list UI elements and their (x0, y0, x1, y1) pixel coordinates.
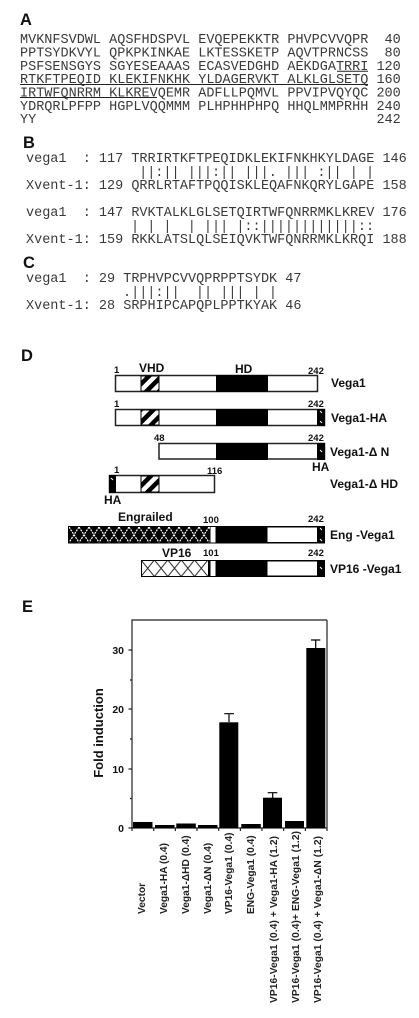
bars (133, 648, 325, 828)
sequence lines: RTKFTPEQID KLEKIFNKHK YLDAGERVKT ALKLGLSETQ 160 (20, 73, 401, 88)
construct: Eng-Vega1: Engrailed (118, 510, 173, 524)
construct: Vega1-HA: 1 (114, 399, 120, 410)
construct: Vega1-delta-N: 242 (308, 433, 324, 444)
construct: Vega1-delta-HD (104, 465, 398, 507)
construct: Vega1-delta-HD: HA (104, 493, 122, 507)
construct: Vega1-delta-N: 48 (154, 433, 165, 444)
construct: Vega1-delta-N: HA (312, 460, 330, 474)
construct: VP16-Vega1: VP16 (162, 546, 192, 560)
alignment block: Xvent-1: 28 SRPHIPCAPQPLPPTKYAK 46 (26, 299, 301, 314)
y axis tick labels: 10 (112, 764, 124, 776)
alignment block 2: vega1 : 147 RVKTALKLGLSETQIRTWFQNRRMKLKREV 176 (26, 206, 407, 221)
heading A: A (20, 11, 32, 29)
x axis category labels: ENG-Vega1 (0.4) (246, 835, 257, 914)
construct: VP16-Vega1: 101 (203, 548, 220, 559)
construct: Eng-Vega1: Eng -Vega1 (330, 528, 395, 542)
panel C: alignment of VHD (23, 254, 301, 314)
construct: Eng-Vega1: 100 (203, 515, 219, 526)
alignment block 1: ||:|| |||:|| |||. ||| :|| | | (131, 166, 374, 181)
sequence lines: PPTSYDKVYL QPKPKINKAE LKTESSKETP AQVTPRNCSS 80 (20, 46, 401, 61)
construct: Vega1: 242 (308, 366, 324, 377)
construct: Vega1: Vega1 (331, 376, 366, 390)
panel B: alignment with Xvent-1 homeodomain (23, 134, 407, 248)
sequence lines: IRTWFQNRRM KLKREVQEMR ADFLLPQMVL PPVIPVQYQC 200 (20, 86, 401, 101)
construct: Vega1-delta-N (154, 433, 389, 474)
alignment block: vega1 : 29 TRPHVPCVVQPRPPTSYDK 47 (26, 272, 301, 287)
construct: VP16-Vega1: VP16 -Vega1 (330, 562, 402, 576)
x axis category labels: Vega1-ΔN (0.4) (203, 843, 214, 914)
y axis tick labels: 20 (112, 704, 124, 716)
construct: Vega1-HA (114, 399, 387, 426)
construct: Vega1-HA: 242 (308, 399, 324, 410)
x axis category labels: VP16-Vega1 (0.4) + Vega1-HA (1.2) (269, 836, 280, 1003)
panel A: protein sequence (20, 11, 401, 128)
sequence lines: YDRQRLPFPP HGPLVQQMMM PLHPHHPHPQ HHQLMMPRHH 240 (20, 100, 401, 115)
sequence lines: PSFSENSGYS SGYESEAAAS ECASVEDGHD AEKDGATRRI 120 (20, 60, 401, 75)
construct: Vega1-delta-HD: Vega1-Δ HD (330, 477, 398, 491)
construct: Vega1 (114, 361, 366, 392)
x axis category labels (137, 831, 324, 1003)
alignment block (26, 272, 301, 314)
construct: Vega1-delta-HD: 116 (207, 466, 222, 477)
construct: Vega1-HA: Vega1-HA (331, 411, 387, 425)
construct: VP16-Vega1: 242 (308, 548, 324, 559)
underlined homeodomain (20, 71, 368, 98)
alignment block 2 (26, 206, 407, 248)
construct: Vega1-delta-HD: 1 (114, 465, 120, 476)
x axis category labels: VP16-Vega1 (0.4) (224, 832, 235, 914)
construct: Vega1: VHD (139, 361, 165, 375)
construct: Vega1: HD (235, 362, 253, 376)
alignment block 1 (26, 152, 407, 194)
panel E: bar chart (22, 598, 327, 1003)
x axis category labels: Vector (137, 883, 148, 914)
axes and ticks (128, 620, 327, 831)
y axis tick labels (112, 645, 124, 835)
alignment block 2: | | | | ||| |::||||||||||||:: (131, 220, 374, 235)
alignment block 2: Xvent-1: 159 RKKLATSLQLSEIQVKTWFQNRRMKLKRQI 188 (26, 233, 407, 248)
alignment block: .|||:|| || ||| | | (123, 286, 277, 301)
construct: Eng-Vega1: 242 (308, 514, 324, 525)
x axis category labels: Vega1-ΔHD (0.4) (181, 835, 192, 914)
y axis tick labels: 0 (118, 823, 124, 835)
panel D: construct diagrams (21, 347, 402, 577)
x axis category labels: VP16-Vega1 (0.4)+ ENG-Vega1 (1.2) (291, 831, 302, 1003)
y axis tick labels: 30 (112, 645, 124, 657)
sequence lines (20, 33, 401, 128)
heading D: D (21, 347, 33, 365)
error bars (224, 640, 320, 798)
y axis title: Fold induction (91, 688, 106, 778)
heading E: E (22, 598, 33, 616)
x axis category labels: Vega1-HA (0.4) (159, 843, 170, 914)
heading C: C (23, 254, 35, 272)
construct: Eng-Vega1 (68, 510, 395, 544)
sequence lines: YY 242 (20, 113, 401, 128)
x axis category labels: VP16-Vega1 (0.4) + Vega1-ΔN (1.2) (313, 836, 324, 1003)
construct: Vega1-delta-N: Vega1-Δ N (330, 445, 389, 459)
alignment block 1: Xvent-1: 129 QRRLRTAFTPQQISKLEQAFNKQRYLGAPE 158 (26, 179, 407, 194)
heading B: B (23, 134, 35, 152)
construct: VP16-Vega1 (141, 546, 402, 577)
construct: Vega1: 1 (114, 365, 120, 376)
alignment block 1: vega1 : 117 TRRIRTKFTPEQIDKLEKIFNKHKYLDAGE 146 (26, 152, 407, 167)
sequence lines: MVKNFSVDWL AQSFHDSPVL EVQEPEKKTR PHVPCVVQPR 40 (20, 33, 401, 48)
